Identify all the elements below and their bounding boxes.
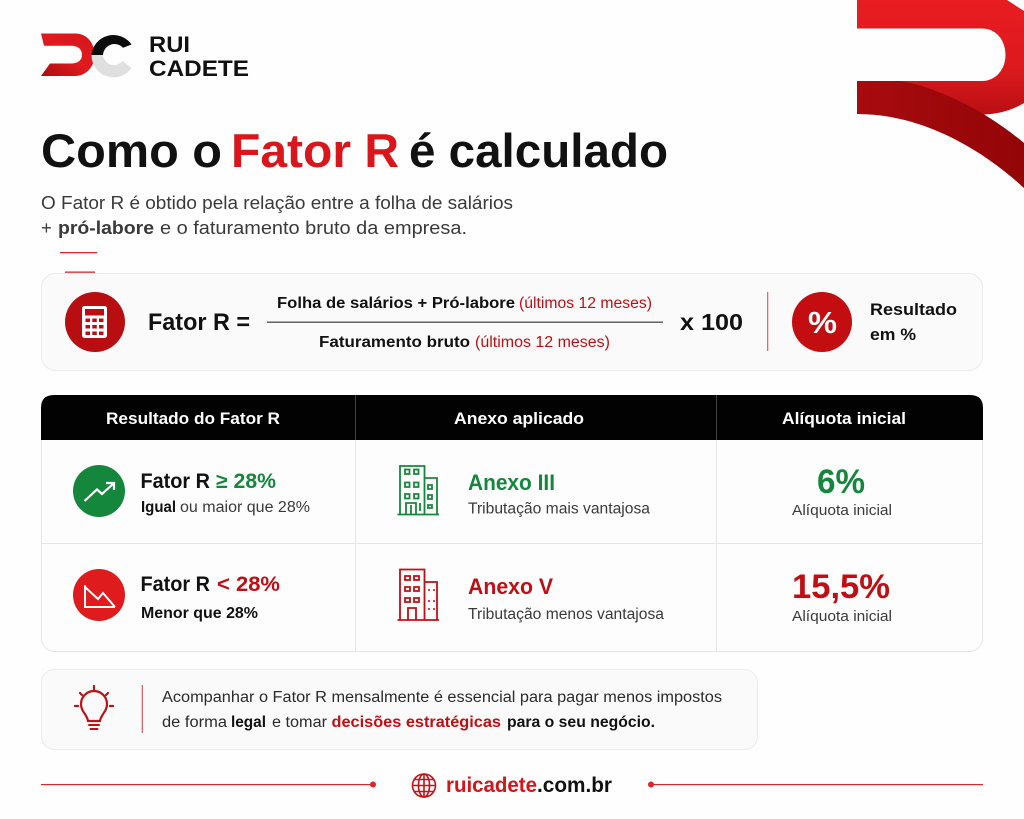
table	[41, 395, 983, 652]
decorative R shape top right	[857, 0, 1024, 188]
accent lines	[60, 252, 97, 273]
tip text: para o seu negócio.	[507, 714, 655, 731]
panel: formula	[42, 274, 982, 370]
website: ruicadete	[446, 774, 537, 797]
logo mark DC	[41, 34, 132, 77]
logo wordmark: CADETE	[149, 56, 249, 81]
row: fator R maior ou igual: Igual	[141, 499, 176, 516]
icon: light bulb	[75, 686, 113, 729]
intro paragraph	[41, 192, 513, 238]
table header: Anexo aplicado	[454, 409, 584, 428]
tip text: Acompanhar o Fator R mensalmente é essencial para pagar menos impostos	[162, 689, 722, 706]
icon: calculator	[65, 292, 125, 352]
icon: globe	[412, 774, 436, 797]
tip text: decisões estratégicas	[332, 714, 501, 731]
intro paragraph: O Fator R é obtido pela relação entre a folha de salários	[41, 192, 513, 213]
row: fator R maior ou igual	[73, 463, 892, 519]
intro paragraph: +	[41, 217, 52, 238]
annex III text	[468, 470, 650, 518]
title: Como o	[41, 124, 222, 177]
row: fator R menor: Fator R	[140, 573, 210, 596]
tip text: e tomar	[272, 714, 327, 731]
tip text	[162, 689, 722, 731]
row: fator R maior ou igual: Fator R	[140, 470, 210, 493]
icon: rising chart	[73, 465, 125, 517]
fraction	[267, 295, 663, 351]
title	[41, 124, 668, 177]
logo: Rui Cadete	[41, 32, 249, 81]
row: fator R maior ou igual: ≥ 28%	[216, 470, 276, 493]
row: fator R menor: < 28%	[217, 573, 280, 596]
row: fator R menor: Menor que 28%	[141, 605, 258, 622]
rate 6%	[792, 463, 892, 519]
rate 6%: 6%	[817, 463, 865, 501]
formula label: Fator R =	[148, 309, 250, 336]
title: Fator R	[231, 124, 399, 177]
icon: building green	[398, 466, 439, 514]
icon: percent	[792, 292, 852, 352]
tip text: de forma	[162, 714, 227, 731]
footer	[41, 774, 983, 797]
icon: percent: %	[808, 305, 837, 340]
logo wordmark	[149, 32, 249, 81]
fraction: Faturamento bruto	[319, 334, 470, 351]
footer line left	[41, 782, 376, 788]
fraction: (últimos 12 meses)	[519, 295, 652, 312]
annex V text	[468, 574, 664, 623]
rate 15,5%: Alíquota inicial	[792, 608, 892, 625]
row: fator R menor	[73, 568, 892, 625]
annex III text: Tributação mais vantajosa	[468, 500, 650, 518]
website: .com.br	[537, 774, 612, 797]
table body	[42, 420, 982, 652]
rate 15,5%	[792, 568, 892, 625]
result label: Resultado	[870, 300, 957, 319]
result label: em %	[870, 325, 916, 344]
title: é calculado	[409, 124, 668, 177]
logo wordmark: RUI	[149, 32, 190, 57]
annex III text: Anexo III	[468, 470, 555, 495]
fraction: (últimos 12 meses)	[475, 334, 610, 351]
annex V text: Tributação menos vantajosa	[468, 606, 664, 623]
fraction: Folha de salários + Pró-labore	[277, 295, 515, 312]
tip text: legal	[231, 714, 266, 731]
callout: tip	[42, 670, 758, 750]
rate 6%: Alíquota inicial	[792, 502, 892, 519]
rate 15,5%: 15,5%	[792, 568, 890, 606]
annex V text: Anexo V	[468, 574, 553, 599]
icon: building red	[398, 570, 439, 620]
intro paragraph: e o faturamento bruto da empresa.	[160, 217, 467, 238]
footer line right	[648, 782, 983, 788]
icon: falling chart	[73, 569, 125, 621]
table header: Alíquota inicial	[782, 409, 906, 428]
table header	[41, 395, 983, 440]
result label	[870, 300, 957, 344]
website	[446, 774, 612, 797]
intro paragraph: pró-labore	[58, 217, 154, 238]
multiplier: x 100	[680, 309, 743, 335]
table header: Resultado do Fator R	[106, 409, 280, 428]
row: fator R maior ou igual: ou maior que 28%	[180, 499, 310, 516]
